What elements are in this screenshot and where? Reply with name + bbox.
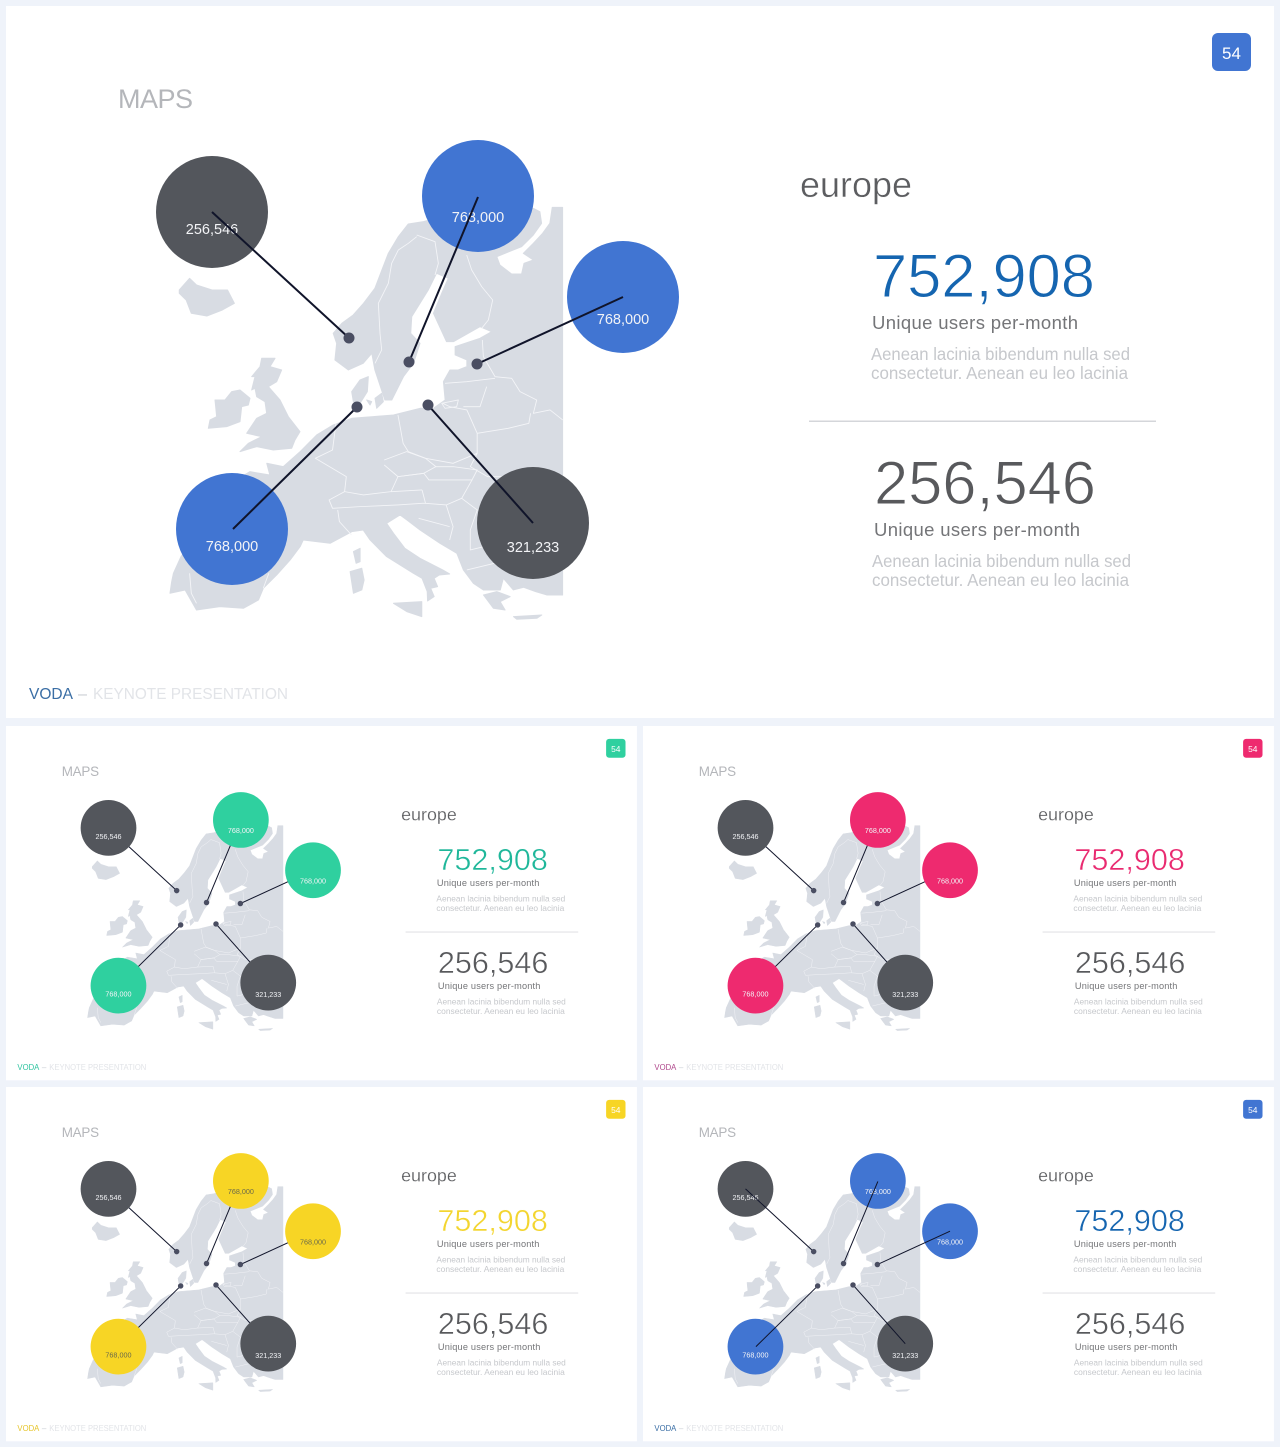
footer: VODA	[654, 1063, 677, 1072]
stats column: Unique users per-month	[874, 519, 1080, 540]
stats column: consectetur. Aenean eu leo lacinia	[1073, 1264, 1201, 1274]
stats column: europe	[800, 164, 912, 205]
page badge	[1243, 1100, 1263, 1119]
stats column: consectetur. Aenean eu leo lacinia	[437, 1367, 565, 1377]
callout circles: 256,546	[95, 1193, 122, 1202]
stats column: Unique users per-month	[438, 981, 540, 991]
europe map	[88, 1187, 283, 1392]
stats column: Unique users per-month	[1075, 981, 1177, 991]
page badge: 54	[1248, 744, 1258, 754]
stats column: consectetur. Aenean eu leo lacinia	[872, 570, 1129, 590]
footer: VODA	[17, 1424, 40, 1433]
stats column: 752,908	[1074, 1204, 1185, 1238]
stats column: europe	[1038, 1165, 1094, 1185]
footer: VODA	[29, 686, 73, 703]
stats column: Unique users per-month	[1075, 1342, 1177, 1352]
connector lines and location dots	[109, 820, 313, 986]
callout circles	[81, 792, 341, 1014]
stats column: 256,546	[874, 449, 1096, 518]
stats column: 752,908	[873, 242, 1095, 311]
stats column: Aenean lacinia bibendum nulla sed	[436, 1255, 565, 1265]
stats column: 256,546	[1075, 1307, 1185, 1341]
callout circles: 768,000	[300, 1238, 326, 1247]
stats column	[1038, 804, 1215, 1016]
stats column: consectetur. Aenean eu leo lacinia	[1073, 903, 1201, 913]
panel: large slide, blue	[6, 6, 1274, 718]
callout circles	[81, 1153, 341, 1375]
callout circles: 256,546	[95, 832, 122, 841]
page badge	[606, 1100, 626, 1119]
panel: small slide, yellow	[6, 1087, 637, 1441]
page badge	[606, 739, 626, 758]
stats column: 256,546	[1075, 946, 1185, 980]
stats column: consectetur. Aenean eu leo lacinia	[871, 363, 1128, 383]
stats column: Aenean lacinia bibendum nulla sed	[437, 997, 566, 1007]
stats column: Aenean lacinia bibendum nulla sed	[1074, 997, 1203, 1007]
heading: maps: MAPS	[118, 84, 193, 114]
page badge: 54	[611, 744, 621, 754]
stats column: Aenean lacinia bibendum nulla sed	[1074, 1358, 1203, 1368]
stats column: 256,546	[438, 1307, 548, 1341]
page badge: 54	[1222, 44, 1241, 63]
callout circles	[718, 792, 978, 1014]
stats column: 752,908	[437, 1204, 548, 1238]
stats column: Unique users per-month	[437, 878, 539, 888]
stats column: europe	[1038, 804, 1094, 824]
callout circles: 768,000	[742, 1351, 768, 1360]
callout circles: 768,000	[228, 1187, 254, 1196]
footer: –	[78, 686, 87, 703]
stats column: Unique users per-month	[437, 1239, 539, 1249]
callout circles: 321,233	[892, 1351, 918, 1360]
heading: maps: MAPS	[699, 1125, 736, 1140]
europe map	[725, 1187, 920, 1392]
callout circles: 768,000	[452, 210, 504, 226]
callout circles: 321,233	[255, 1351, 281, 1360]
callout circles: 768,000	[865, 1187, 891, 1196]
stats column: Aenean lacinia bibendum nulla sed	[1073, 894, 1202, 904]
callout circles: 768,000	[742, 990, 768, 999]
callout circles: 768,000	[105, 990, 131, 999]
stats column: Aenean lacinia bibendum nulla sed	[436, 894, 565, 904]
panel: small slide, green	[6, 726, 637, 1080]
callout circles: 321,233	[892, 990, 918, 999]
footer: KEYNOTE PRESENTATION	[93, 686, 288, 703]
footer: VODA	[17, 1063, 40, 1072]
stats column	[800, 164, 1156, 590]
stats column: consectetur. Aenean eu leo lacinia	[436, 903, 564, 913]
stats column: Aenean lacinia bibendum nulla sed	[872, 551, 1131, 571]
footer: –	[42, 1063, 47, 1072]
callout circles	[156, 140, 679, 585]
connector lines and location dots	[746, 1181, 950, 1347]
europe map	[88, 826, 283, 1031]
stats column: consectetur. Aenean eu leo lacinia	[437, 1006, 565, 1016]
callout circles: 768,000	[300, 877, 326, 886]
stats column	[1038, 1165, 1215, 1377]
footer: KEYNOTE PRESENTATION	[686, 1063, 784, 1072]
heading: maps: MAPS	[699, 764, 736, 779]
page badge: 54	[611, 1105, 621, 1115]
stats column: Unique users per-month	[1074, 1239, 1176, 1249]
footer: KEYNOTE PRESENTATION	[49, 1063, 147, 1072]
panel: small slide, blue	[643, 1087, 1274, 1441]
stats column: consectetur. Aenean eu leo lacinia	[1074, 1006, 1202, 1016]
stats column: Unique users per-month	[1074, 878, 1176, 888]
page badge	[1212, 33, 1251, 71]
footer: –	[679, 1424, 684, 1433]
callout circles: 768,000	[206, 539, 258, 555]
stats column: europe	[401, 1165, 457, 1185]
stats column: Aenean lacinia bibendum nulla sed	[437, 1358, 566, 1368]
heading: maps: MAPS	[62, 764, 99, 779]
footer: VODA	[654, 1424, 677, 1433]
connector lines and location dots	[109, 1181, 313, 1347]
stats column: europe	[401, 804, 457, 824]
europe map	[170, 207, 563, 619]
stats column: Aenean lacinia bibendum nulla sed	[871, 344, 1130, 364]
stats column: consectetur. Aenean eu leo lacinia	[436, 1264, 564, 1274]
stats column: 752,908	[1074, 843, 1185, 877]
stats column: Unique users per-month	[872, 312, 1078, 333]
callout circles: 256,546	[732, 832, 759, 841]
footer: –	[42, 1424, 47, 1433]
footer: KEYNOTE PRESENTATION	[49, 1424, 147, 1433]
stats column	[401, 1165, 578, 1377]
callout circles	[718, 1153, 978, 1375]
page badge	[1243, 739, 1263, 758]
europe map	[725, 826, 920, 1031]
callout circles: 256,546	[732, 1193, 759, 1202]
footer: KEYNOTE PRESENTATION	[686, 1424, 784, 1433]
callout circles: 768,000	[228, 826, 254, 835]
stats column: 752,908	[437, 843, 548, 877]
panel: small slide, pink	[643, 726, 1274, 1080]
callout circles: 256,546	[186, 222, 238, 238]
callout circles: 768,000	[937, 877, 963, 886]
stats column	[401, 804, 578, 1016]
footer: –	[679, 1063, 684, 1072]
connector lines and location dots	[212, 197, 623, 529]
heading: maps: MAPS	[62, 1125, 99, 1140]
stats column: Aenean lacinia bibendum nulla sed	[1073, 1255, 1202, 1265]
stats column: Unique users per-month	[438, 1342, 540, 1352]
callout circles: 768,000	[105, 1351, 131, 1360]
callout circles: 768,000	[865, 826, 891, 835]
stats column: consectetur. Aenean eu leo lacinia	[1074, 1367, 1202, 1377]
stats column: 256,546	[438, 946, 548, 980]
callout circles: 768,000	[597, 312, 649, 328]
connector lines and location dots	[746, 820, 950, 986]
callout circles: 321,233	[507, 540, 559, 556]
callout circles: 321,233	[255, 990, 281, 999]
page badge: 54	[1248, 1105, 1258, 1115]
callout circles: 768,000	[937, 1238, 963, 1247]
